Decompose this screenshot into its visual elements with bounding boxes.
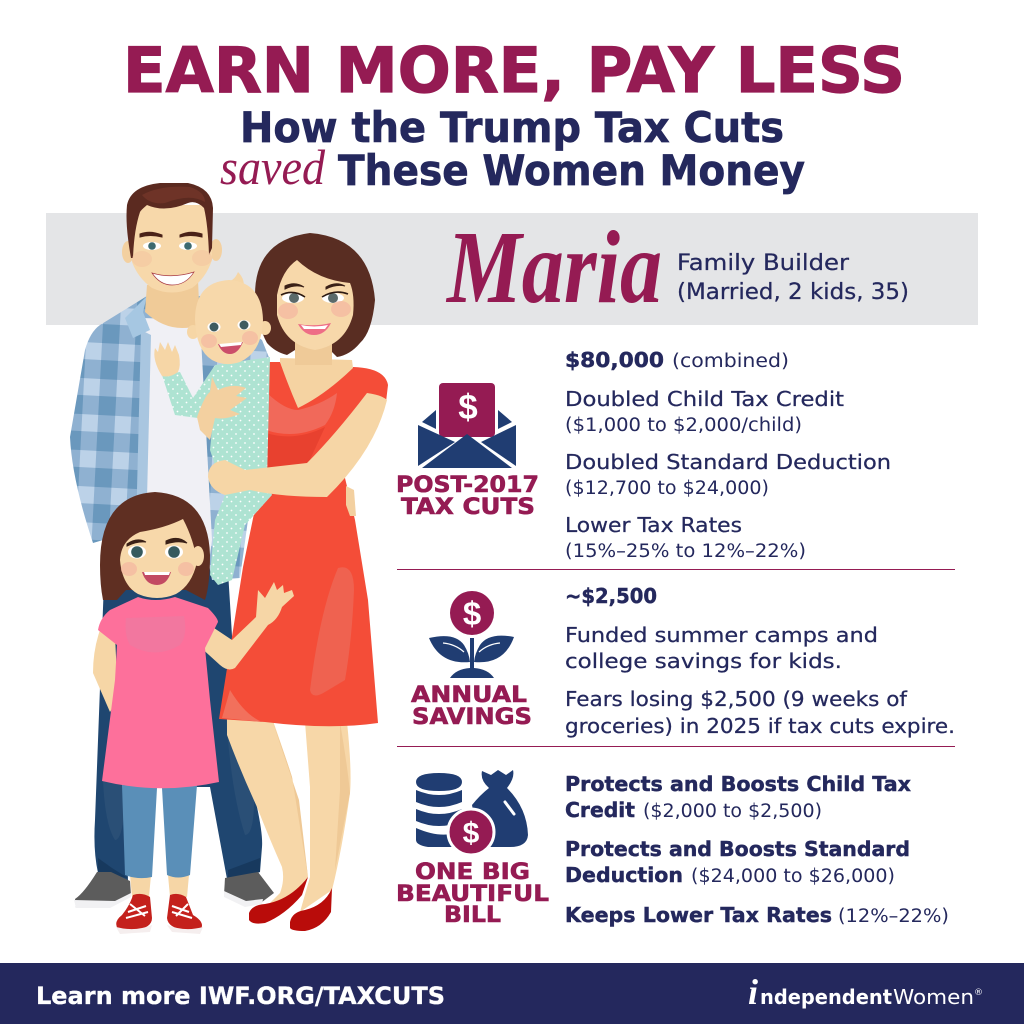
details: [565, 772, 949, 927]
subtitle: How the Trump Tax Cuts: [240, 103, 784, 152]
label: [396, 860, 549, 928]
girl: pink dress: [98, 597, 219, 788]
label: TAX CUTS: [401, 495, 535, 520]
section: one big beautiful bill: [396, 770, 949, 928]
section: annual savings: [411, 584, 955, 738]
label: [411, 683, 532, 730]
man: collar: [125, 296, 150, 338]
details: ($1,000 to $2,000/child): [565, 415, 802, 436]
woman: legs: [227, 715, 351, 912]
persona description: [677, 250, 909, 305]
man: hand at waist: [346, 486, 356, 516]
details: Protects and Boosts Child Tax: [565, 772, 911, 796]
label: ANNUAL: [411, 683, 527, 708]
details: ($24,000 to $26,000): [691, 866, 895, 887]
logo: Independent Women: Women: [893, 985, 974, 1009]
details: college savings for kids.: [565, 649, 842, 673]
details: [565, 584, 955, 738]
icon: envelope with dollar: [418, 383, 516, 468]
details: Doubled Child Tax Credit: [565, 387, 844, 411]
details: (12%–22%): [838, 906, 949, 927]
girl: ankles: [130, 875, 189, 897]
logo: Independent Women: ndependent: [760, 985, 892, 1009]
girl: red sneakers: [116, 894, 203, 934]
details: ($12,700 to $24,000): [565, 478, 769, 499]
footer bar: [0, 963, 1024, 1024]
label: BILL: [444, 903, 501, 928]
woman: arm holding baby: [208, 393, 387, 497]
details: groceries) in 2025 if tax cuts expire.: [565, 714, 955, 738]
man: legs and shoes: [74, 555, 274, 908]
title: EARN MORE, PAY LESS: [123, 34, 905, 107]
details: Fears losing $2,500 (9 weeks of: [565, 687, 908, 711]
logo: Independent Women: ®: [974, 988, 983, 998]
girl: figure: [93, 492, 294, 934]
label: BEAUTIFUL: [396, 882, 549, 907]
details: Doubled Standard Deduction: [565, 450, 891, 474]
label: POST-2017: [396, 473, 539, 498]
details: [565, 348, 891, 562]
woman: red dress: [219, 362, 388, 726]
man: hand on baby: [197, 377, 247, 440]
details: ($2,000 to $2,500): [643, 801, 822, 822]
subtitle: saved: [220, 139, 326, 195]
girl: jeans: [122, 785, 197, 878]
girl: left arm: [93, 630, 118, 712]
man: neck: [145, 280, 200, 328]
girl: dress yoke: [126, 616, 185, 652]
baby: head: [187, 272, 271, 364]
name band: [46, 213, 978, 325]
icon: coin stack and money bag: $: [463, 817, 480, 850]
man: shirt placket: [136, 330, 151, 540]
details: Credit: [565, 798, 635, 822]
details: Protects and Boosts Standard: [565, 837, 910, 861]
label: SAVINGS: [412, 705, 532, 730]
girl: hair and face: [100, 492, 210, 600]
logo: Independent Women: i: [748, 972, 758, 1012]
details: (combined): [672, 351, 789, 372]
divider lines: [397, 569, 955, 747]
name: Maria: Maria: [445, 210, 662, 325]
footer link text: Learn more IWF.ORG/TAXCUTS: [36, 982, 445, 1010]
illustration: family: [70, 183, 388, 934]
details: ~$2,500: [565, 584, 657, 608]
woman: dress highlights: [222, 393, 354, 722]
man: plaid shirt: [70, 296, 270, 580]
label: [396, 473, 539, 520]
label: ONE BIG: [415, 860, 530, 885]
icon: envelope with dollar: $: [458, 388, 478, 427]
man: head: [122, 183, 222, 292]
details: Funded summer camps and: [565, 623, 878, 647]
baby: waving hand: [154, 342, 180, 376]
persona description: Family Builder: [677, 250, 850, 276]
girl: right arm: [198, 582, 294, 669]
details: (15%–25% to 12%–22%): [565, 541, 806, 562]
woman: head and hair: [255, 233, 375, 365]
details: Keeps Lower Tax Rates: [565, 903, 832, 927]
icon: money plant: $: [463, 595, 481, 632]
persona description: (Married, 2 kids, 35): [677, 279, 909, 305]
baby: mint outfit: [162, 357, 272, 585]
details: $80,000: [565, 348, 664, 372]
man: t-shirt: [143, 318, 212, 570]
details: Lower Tax Rates: [565, 513, 742, 537]
icon: coin stack and money bag: [416, 770, 528, 855]
section: post-2017 tax cuts: [396, 348, 891, 562]
details: Deduction: [565, 863, 683, 887]
subtitle: These Women Money: [338, 146, 805, 195]
woman: red shoes: [249, 877, 332, 931]
icon: money plant: [429, 591, 514, 678]
woman: chest: [280, 358, 353, 408]
subtitle: [220, 103, 805, 195]
logo: Independent Women: [748, 972, 983, 1012]
